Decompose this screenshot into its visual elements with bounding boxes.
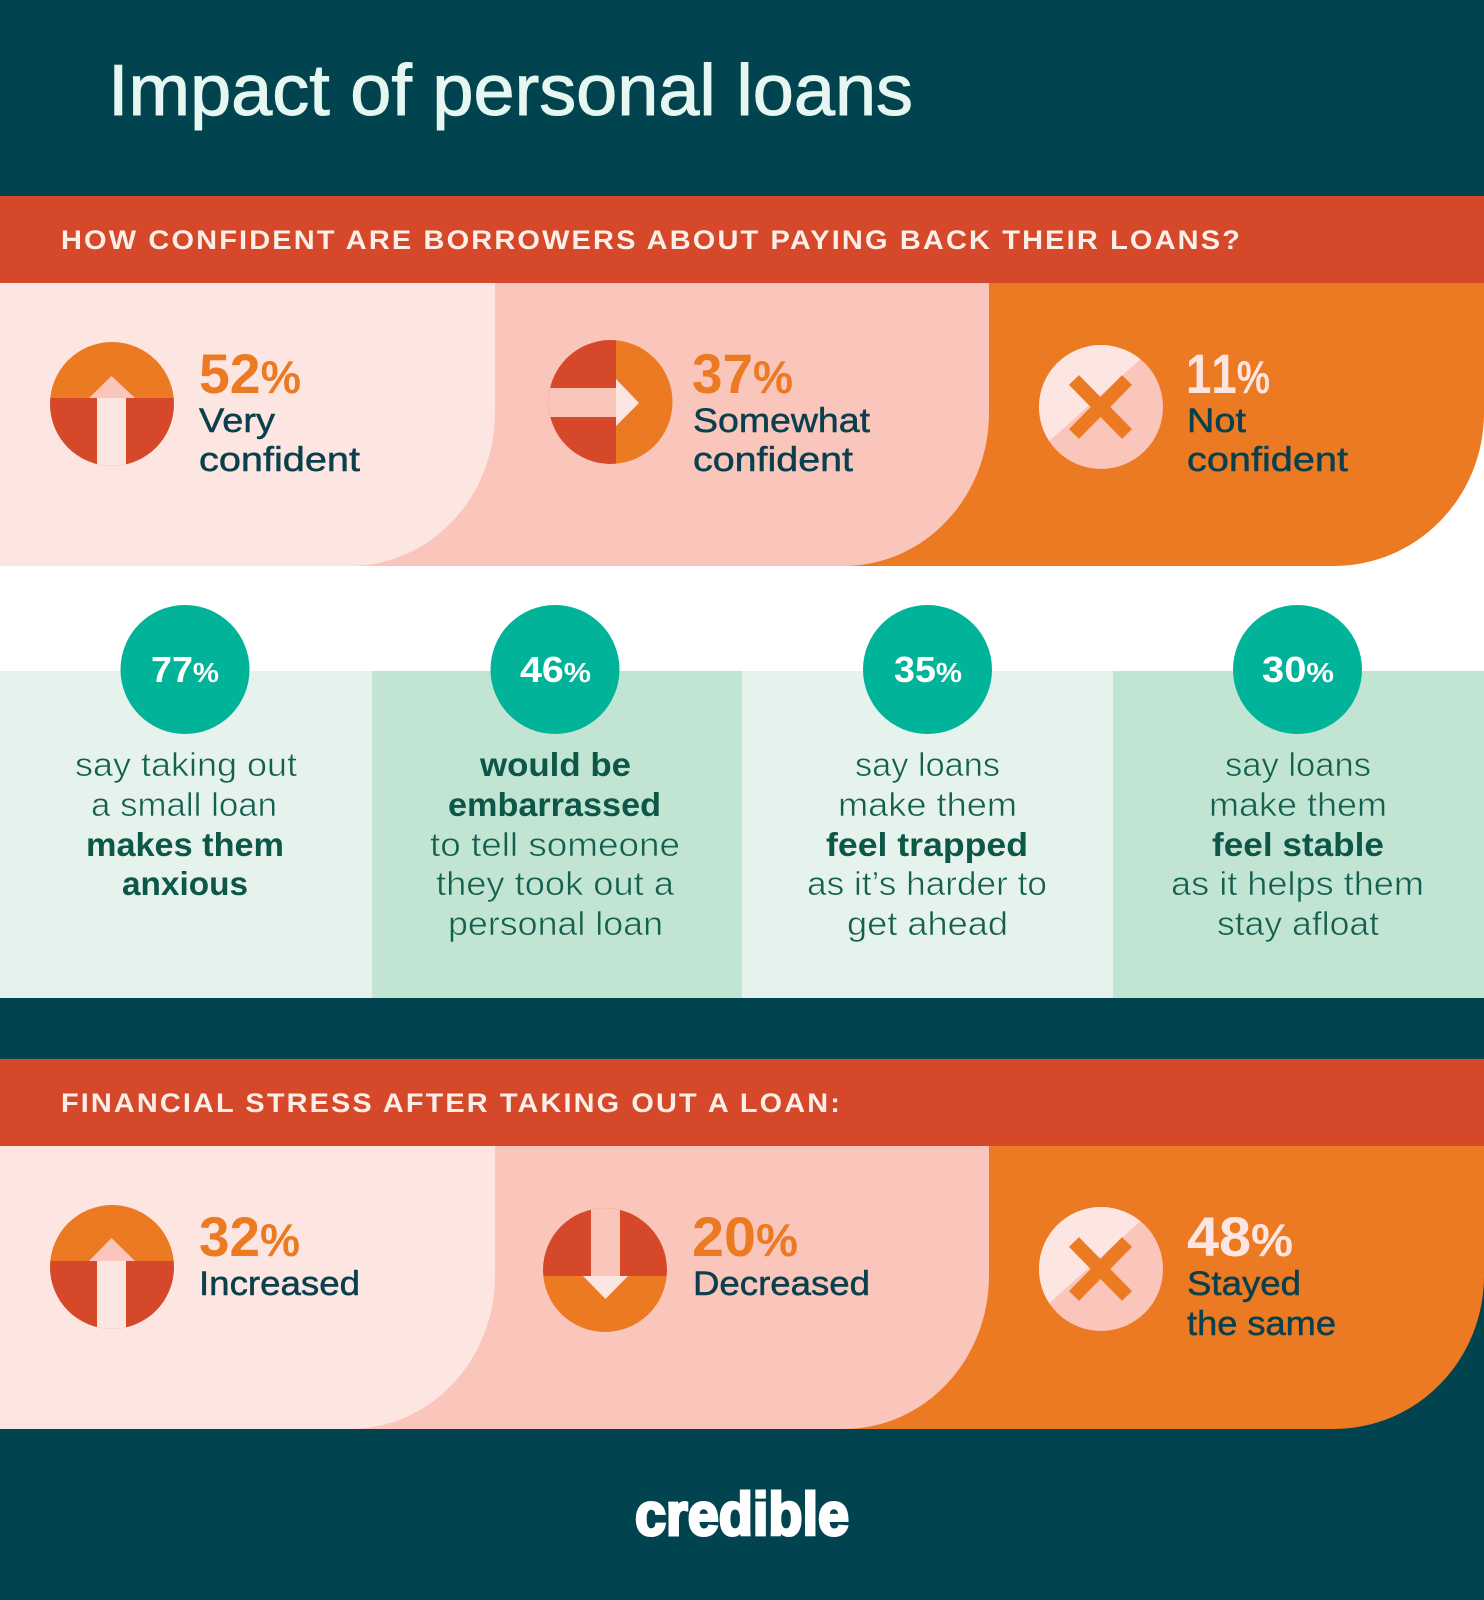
panel: not confident [0, 283, 1484, 566]
column: embarrassed: to tell someone [430, 826, 680, 863]
badge: 30%: 30% [1262, 649, 1334, 690]
stat: 48% stayed the same [1187, 1205, 1336, 1343]
panel: somewhat confident [0, 283, 989, 566]
badge: 46% [490, 605, 620, 734]
stat: 11% not confident: Not [1187, 402, 1247, 440]
stat: 48% stayed the same: Stayed [1187, 1265, 1301, 1303]
panel: financial stress [0, 1059, 1484, 1429]
icon: right arrow [548, 340, 673, 464]
section heading: stress: FINANCIAL STRESS AFTER TAKING OUT A LOAN: [61, 1088, 842, 1118]
column: trapped: as it’s harder to [807, 865, 1047, 902]
column: anxious: say taking out [75, 746, 297, 783]
column: embarrassed: would be [479, 746, 631, 783]
badge: 35% [863, 605, 992, 734]
stat: 11% not confident: confident [1187, 441, 1349, 479]
column: trapped [742, 605, 1113, 998]
column: stable: stay afloat [1217, 905, 1379, 942]
icon: down arrow [543, 1208, 667, 1332]
title: Impact of personal loans [108, 51, 913, 131]
badge: 77% [120, 605, 250, 734]
column: stable: make them [1209, 786, 1387, 823]
stat: 37% somewhat confident: Somewhat [693, 402, 871, 440]
column: anxious: a small loan [91, 786, 277, 823]
panel: increased [0, 1146, 495, 1429]
column: stable: as it helps them [1171, 865, 1424, 902]
column: trapped: get ahead [847, 905, 1008, 942]
column: anxious: anxious [122, 865, 248, 902]
panel: stayed the same [0, 1146, 1484, 1429]
icon: up arrow [50, 342, 174, 466]
panel: borrower confidence [0, 196, 1484, 671]
stat: 32% increased [199, 1205, 360, 1303]
stat: 20% decreased [692, 1205, 870, 1303]
icon: up arrow [50, 1205, 174, 1329]
column: trapped: feel trapped [826, 826, 1028, 863]
badge: 30% [1233, 605, 1362, 734]
column: anxious [0, 605, 372, 998]
stat: 37% somewhat confident: confident [693, 441, 854, 479]
panel: decreased [0, 1146, 989, 1429]
stat: 32% increased: Increased [199, 1265, 360, 1303]
panel: feelings about loans [0, 605, 1484, 998]
white band behind curved panels [0, 283, 1484, 671]
stat: 48% stayed the same: 48% [1187, 1205, 1293, 1268]
stat: 37% somewhat confident [692, 342, 871, 479]
stat: 20% decreased: Decreased [693, 1265, 870, 1303]
stat: 48% stayed the same: the same [1187, 1305, 1336, 1343]
column: stable: say loans [1225, 746, 1371, 783]
column: stable: feel stable [1212, 826, 1384, 863]
column: embarrassed: embarrassed [448, 786, 661, 823]
column: anxious: makes them [86, 826, 284, 863]
stat: 20% decreased: 20% [692, 1205, 798, 1268]
badge: 46%: 46% [520, 649, 591, 690]
column: embarrassed: personal loan [448, 905, 663, 942]
column: embarrassed: they took out a [436, 865, 675, 902]
column: stable [1113, 605, 1484, 998]
stat: 11% not confident: 11% [1186, 342, 1270, 405]
stat: 52% very confident: Very [199, 402, 275, 440]
section heading: confidence: HOW CONFIDENT ARE BORROWERS ABOUT PAYING BACK THEIR LOANS? [61, 225, 1242, 255]
badge: 77%: 77% [151, 649, 219, 690]
column: trapped: make them [838, 786, 1017, 823]
section heading: confidence [0, 196, 1484, 283]
column: embarrassed [372, 605, 742, 998]
stat: 37% somewhat confident: 37% [692, 342, 793, 405]
icon: cross [1039, 345, 1163, 469]
stat: 52% very confident: 52% [199, 342, 301, 405]
stat: 52% very confident: confident [199, 441, 361, 479]
badge: 35%: 35% [894, 649, 962, 690]
stat: 11% not confident [1186, 342, 1349, 479]
logo: credible: credible [635, 1481, 849, 1548]
stat: 32% increased: 32% [199, 1205, 300, 1268]
stat: 52% very confident [199, 342, 361, 479]
panel: very confident [0, 283, 495, 566]
column: trapped: say loans [855, 746, 1000, 783]
section heading: stress [0, 1059, 1484, 1146]
icon: cross [1039, 1207, 1163, 1331]
